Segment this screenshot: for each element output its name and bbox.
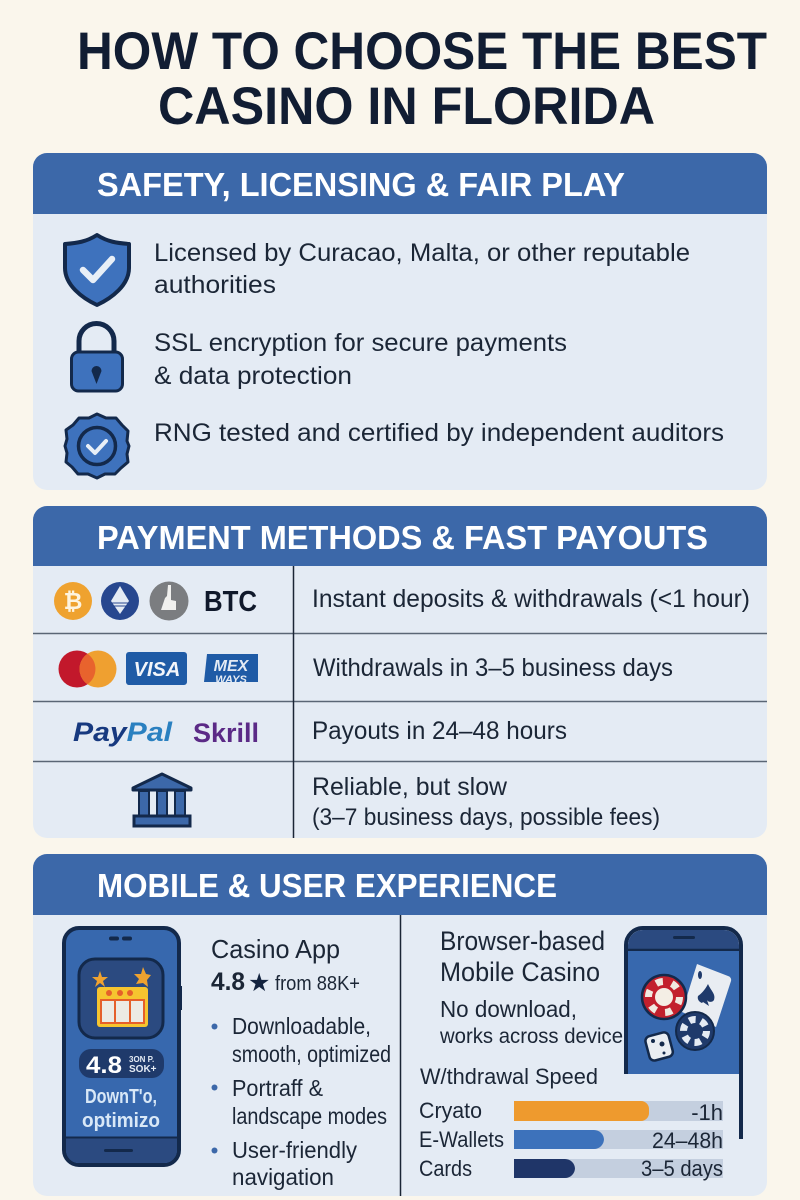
text: licensed: authorities [154,271,276,299]
icon: amex style logo: MEX [214,658,250,675]
text: rng: RNG tested and certified by independent auditors [154,419,724,447]
text: withdrawals: Withdrawals in 3–5 business days [313,654,673,682]
text: payouts: Payouts in 24–48 hours [312,717,567,745]
text: app rating: from 88K+ [275,973,360,995]
icon: casino app phone [64,928,182,1165]
list: app features: navigation [232,1164,334,1190]
bar: e-wallets: E-Wallets [419,1127,504,1152]
icon: casino app phone: optimizo [82,1110,160,1132]
panel: payment methods and fast payouts [33,506,767,838]
heading: safety: SAFETY, LICENSING & FAIR PLAY [97,166,625,203]
icon: bitcoin: ₿ [64,588,82,614]
text: browser-based heading [440,926,605,987]
logo: skrill: Skrill [193,718,259,748]
bar: e-wallets: 24–48h [652,1128,723,1153]
heading: payment: PAYMENT METHODS & FAST PAYOUTS [97,519,708,556]
title [77,22,767,136]
title: CASINO IN FLORIDA [158,77,655,136]
icon: litecoin [150,582,188,620]
icon: shield [65,235,129,305]
bar: crypto: -1h [691,1100,723,1125]
text: ssl: SSL encryption for secure payments [154,329,567,357]
title: HOW TO CHOOSE THE BEST [77,22,767,81]
bar: cards: 3–5 days [641,1156,723,1181]
icon: casino app phone: SOK+ [129,1064,157,1075]
text: app rating: 4.8 [211,968,245,996]
list: app features: Portraff & [232,1075,323,1101]
icon: mastercard [58,650,116,688]
icon: playing card [682,964,731,1027]
text: casino app heading: Casino App [211,934,340,964]
icon: casino app phone: DownT'o, [85,1086,157,1108]
label: btc: BTC [204,586,257,618]
text: licensed: Licensed by Curacao, Malta, or other reputable [154,239,690,267]
bar: cards: Cards [419,1156,472,1181]
bar: e-wallets [419,1127,723,1153]
text: app rating [211,968,360,997]
icon: bitcoin [54,582,92,620]
chart: withdrawal speed [419,1064,723,1181]
panel: safety, licensing and fair play [33,153,767,490]
bar: crypto [419,1098,723,1125]
text: reliable: Reliable, but slow [312,773,508,801]
text: reliable [312,773,660,831]
logo: paypal: PayPal [73,717,173,747]
text: ssl [154,329,567,390]
text: instant deposits: Instant deposits & withdrawals (<1 hour) [312,585,750,613]
icon: ethereum [101,582,139,620]
list: app features: Downloadable, [232,1013,371,1039]
icon: certified badge [65,414,129,478]
text: no download [439,996,623,1048]
icon: red chip [642,975,686,1019]
list: app features: smooth, optimized [232,1041,391,1067]
text: browser-based heading: Browser-based [440,926,605,956]
panel: mobile and user experience [33,854,767,1196]
icon: padlock [72,324,122,391]
icon: bank [133,774,191,826]
bar: cards [419,1156,723,1181]
list: app features [212,1013,391,1190]
icon: visa [126,652,187,685]
text: reliable: (3–7 business days, possible fees) [312,804,660,831]
text: app rating: ★ [248,969,270,997]
icon: visa: VISA [134,659,180,681]
text: licensed [154,239,690,299]
text: ssl: & data protection [154,362,352,390]
bar: crypto: Cryato [419,1098,482,1123]
heading: mobile: MOBILE & USER EXPERIENCE [97,867,557,904]
icon: amex style logo [204,654,258,686]
icon: amex style logo: WAYS [215,674,247,686]
icon: casino app phone: 3ON P. [129,1055,154,1064]
icon: browser casino phone [626,928,741,1139]
list: app features: landscape modes [232,1103,387,1129]
text: no download: No download, [440,996,577,1022]
text: no download: works across device [439,1025,623,1048]
list: app features: User-friendly [232,1137,357,1163]
icon: blue chip [676,1012,714,1050]
icon: die [644,1031,674,1062]
icon: casino app phone: 4.8 [86,1052,122,1079]
text: browser-based heading: Mobile Casino [440,957,600,987]
chart heading: W/thdrawal Speed [420,1064,598,1089]
